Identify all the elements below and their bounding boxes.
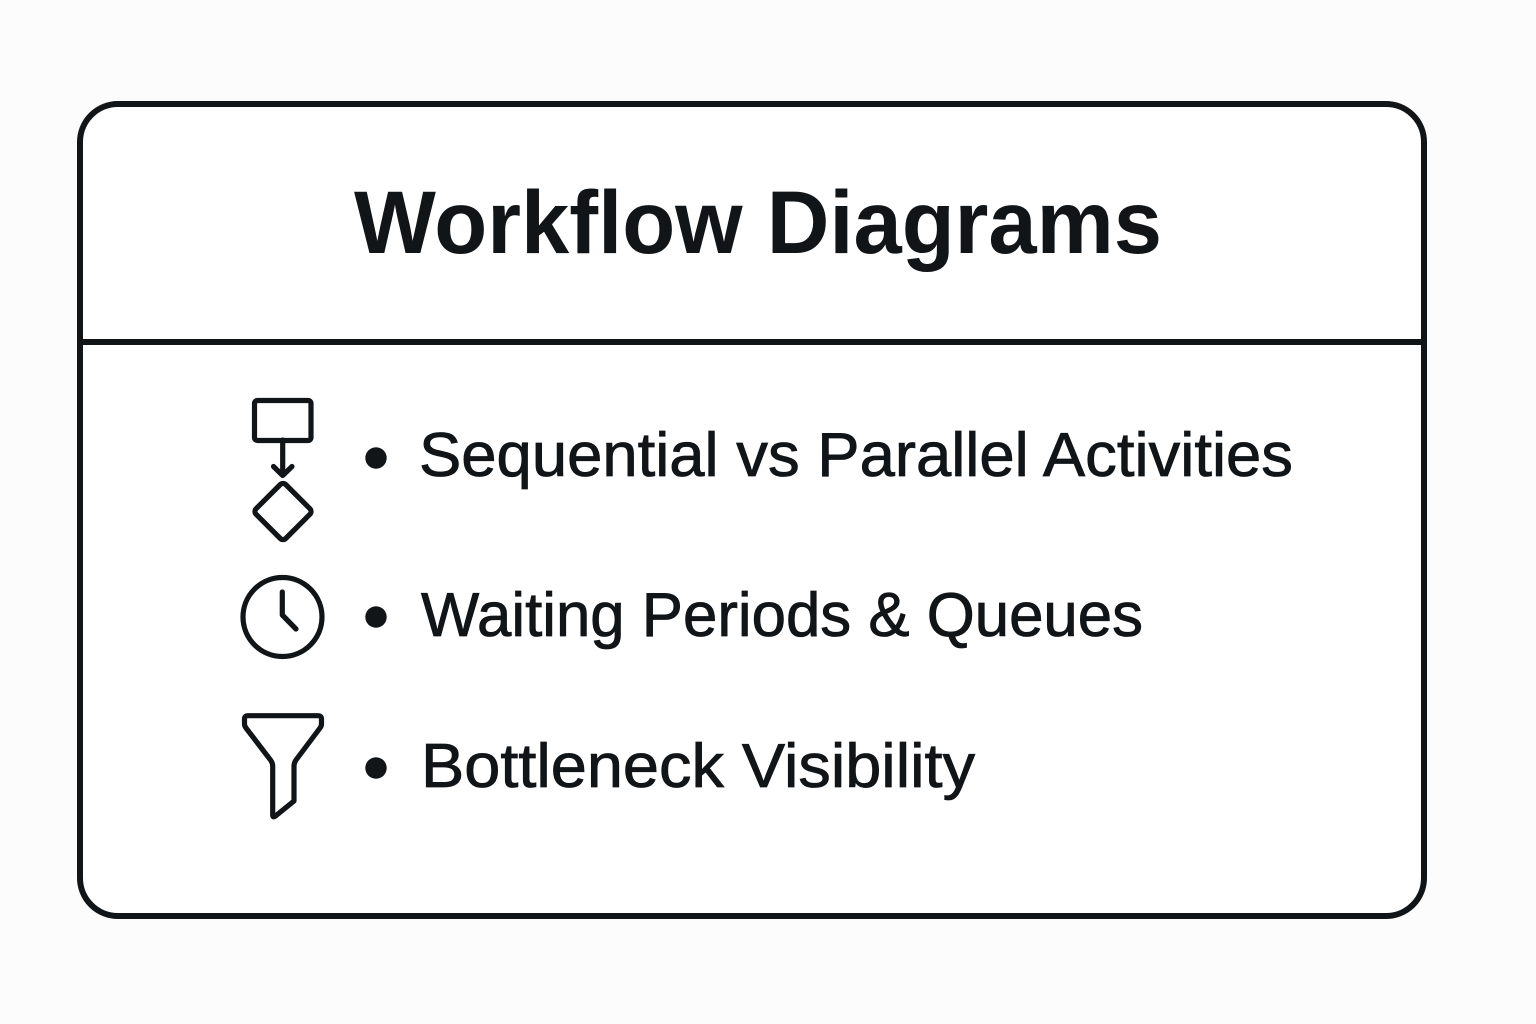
list item: waiting periods and queues: Waiting Periods & Queues — [421, 581, 1143, 650]
list item: bottleneck visibility: Bottleneck Visibility — [421, 732, 975, 801]
icon: flowchart box, arrow and diamond — [253, 400, 313, 541]
title: Workflow Diagrams — [354, 172, 1162, 272]
icon: clock — [243, 578, 322, 656]
panel: workflow diagrams card — [80, 104, 1424, 916]
list item: sequential vs parallel activities: Sequential vs Parallel Activities — [419, 421, 1293, 490]
icon: funnel — [244, 716, 322, 817]
